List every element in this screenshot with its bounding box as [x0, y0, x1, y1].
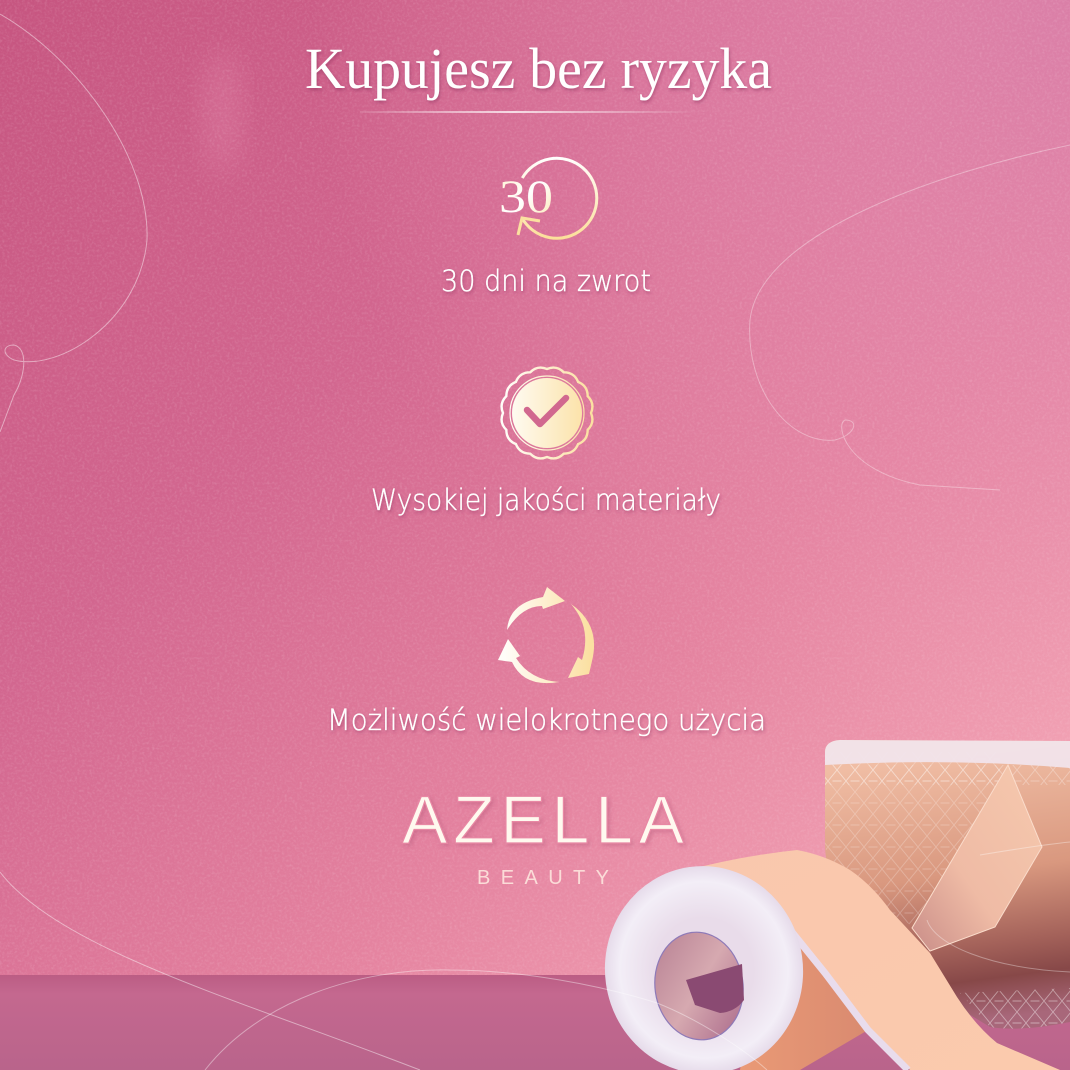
- icon: 30-day return: 30: [499, 171, 553, 223]
- roll side: [740, 900, 868, 1070]
- title: Kupujesz bez ryzyka: [305, 36, 772, 101]
- icon: 30-day return: [499, 158, 597, 238]
- roll face: [591, 853, 817, 1070]
- label: reusable many times: Możliwość wielokrotnego użycia: [327, 703, 766, 737]
- strip white edge: [783, 921, 908, 1070]
- unrolled strip: [680, 850, 1060, 1070]
- logo: Azella Beauty: AZELLA: [402, 782, 685, 858]
- icon: reusable arrows: [498, 587, 594, 683]
- roll hole: [648, 926, 750, 1046]
- back silicone tape roll: [825, 740, 1070, 1029]
- peeled flap: [912, 765, 1042, 951]
- title underline: [360, 111, 700, 113]
- icon: quality badge: [502, 368, 592, 458]
- logo: Azella Beauty: BEAUTY: [477, 867, 609, 889]
- floor: [0, 975, 1070, 1070]
- label: high quality materials: Wysokiej jakości materiały: [371, 483, 721, 517]
- front tape roll: [591, 850, 1060, 1070]
- label: 30 days to return: 30 dni na zwrot: [441, 264, 651, 298]
